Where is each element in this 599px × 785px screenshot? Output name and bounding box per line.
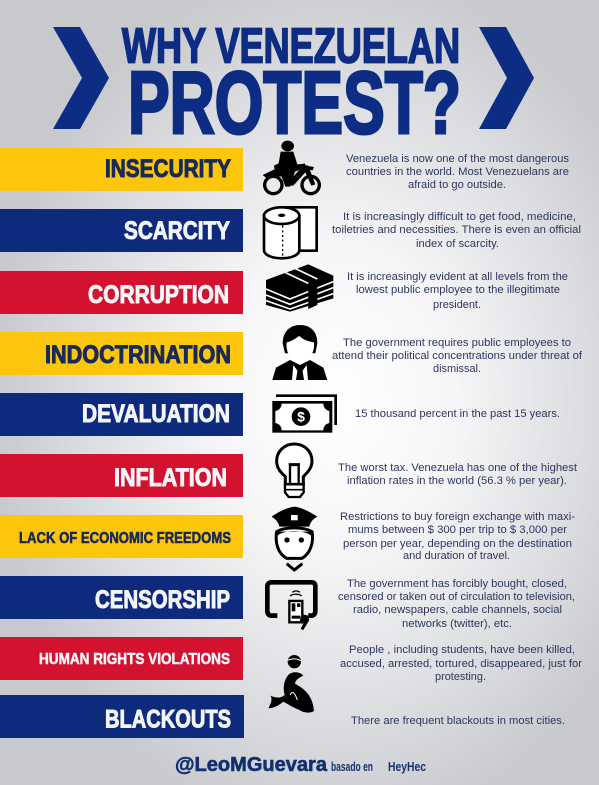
icon: censored device [267,582,315,630]
description [338,578,575,630]
description: Venezuela is now one of the most dangerous [346,153,569,165]
heading: HUMAN RIGHTS VIOLATIONS [39,651,230,668]
source: HeyHec [388,760,426,774]
description: 15 thousand percent in the past 15 years. [355,408,560,420]
description: networks (twitter), etc. [402,618,512,630]
description: People , including students, have been killed, [349,644,575,656]
description [332,211,581,250]
title line 1: WHY VENEZUELAN [122,20,460,74]
bar [0,637,243,680]
panel: human rights violations [0,637,582,713]
bar [0,332,243,375]
description: lowest public employee to the illegitimate [356,284,560,296]
bar [0,576,243,619]
description: toiletries and necessities. There is even an official [332,224,581,236]
bar [0,148,243,191]
heading: BLACKOUTS [105,706,231,734]
description [332,337,583,375]
panel: lack of economic freedoms [0,507,575,570]
bar [0,393,243,436]
panel: scarcity [0,207,581,258]
left chevron [53,27,109,129]
description: inflation rates in the world (56.3 % per year). [347,475,567,487]
description: countries in the world. Most Venezuelans are [346,166,569,178]
icon: money stacks [266,264,333,312]
heading: LACK OF ECONOMIC FREEDOMS [19,530,231,547]
description: It is increasingly difficult to get food, medicine, [343,211,576,223]
description: index of scarcity. [416,238,499,250]
description: censored or taken out of circulation to television, [338,591,575,603]
description: radio, newspapers, cable channels, social [353,604,562,616]
icon: light bulb [277,444,312,497]
heading: CORRUPTION [88,281,229,309]
based on: basado en [331,760,373,774]
description: The government requires public employees to [343,337,571,349]
description: and duration of travel. [403,550,510,562]
description: It is increasingly evident at all levels from the [347,271,568,283]
title [53,20,534,152]
description [340,511,575,562]
footer credit [175,754,426,776]
title line 2: PROTEST? [128,53,461,152]
heading: CENSORSHIP [95,586,230,614]
handle: @LeoMGuevara [175,754,328,776]
icon: motorcycle [263,141,319,194]
description: person per year, depending on the destination [343,538,572,550]
description: There are frequent blackouts in most cities. [351,715,565,727]
bar [0,454,243,497]
right chevron [479,27,534,129]
heading: DEVALUATION [82,400,230,428]
icon: police officer [272,507,317,570]
bar [0,271,243,314]
heading: INDOCTRINATION [45,341,231,369]
panel: indoctrination [0,325,583,380]
bar [0,209,243,252]
icon: banknote: $ [297,409,305,425]
description: attend their political concentrations under threat of [332,350,583,362]
panel: censorship [0,576,575,630]
panel: inflation [0,444,577,497]
panel: devaluation [0,393,560,436]
icon: toilet paper [264,207,317,258]
description: afraid to go outside. [408,179,506,191]
icon: man in suit [272,325,327,380]
description: The government has forcibly bought, closed, [347,578,567,590]
icon: banknote [272,396,336,433]
description [346,153,569,191]
heading: INFLATION [114,464,227,492]
description: accused, arrested, tortured, disappeared, just for [340,658,582,670]
description: dismissal. [433,363,481,375]
heading: INSECURITY [105,155,231,183]
description [338,462,577,487]
bar [0,515,243,558]
description [347,271,568,311]
description: Restrictions to buy foreign exchange with maxi- [340,511,575,523]
heading: SCARCITY [124,217,230,245]
description: The worst tax. Venezuela has one of the highest [338,462,577,474]
panel: blackouts [0,695,565,738]
panel: insecurity [0,141,569,194]
icon: seal with ball [268,655,314,713]
description: protesting. [435,671,486,683]
description: president. [433,299,481,311]
description: mums between $ 300 per trip to $ 3,000 per [348,524,567,536]
description [340,644,582,683]
panel: corruption [0,264,568,314]
bar [0,695,244,738]
